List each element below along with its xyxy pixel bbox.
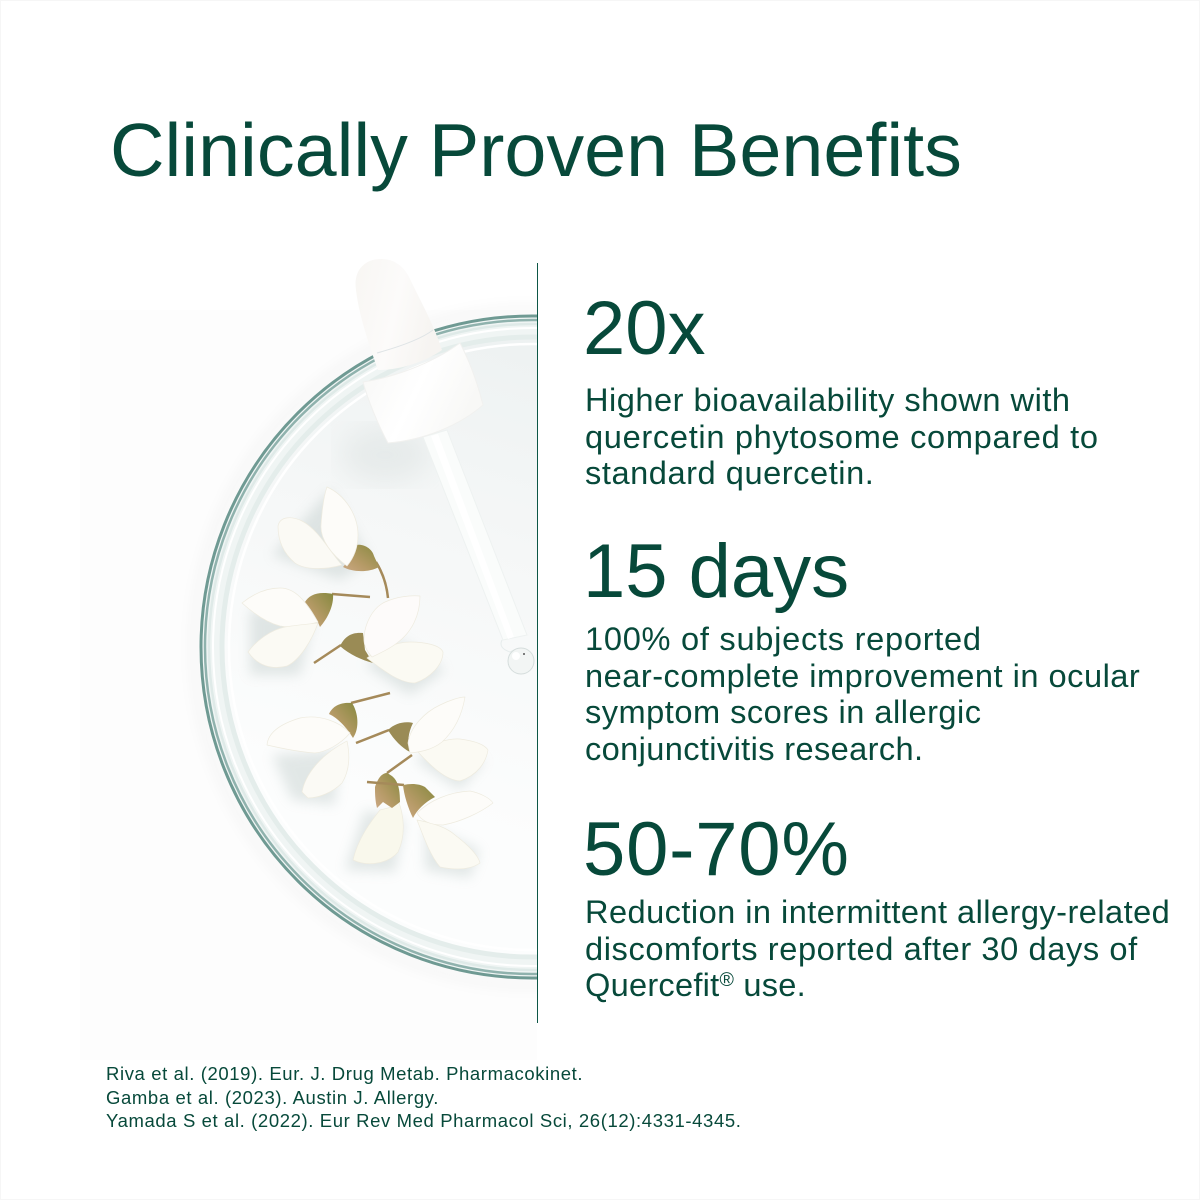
flower A <box>278 487 388 598</box>
stat: 50-70% <box>583 807 1170 1003</box>
flower F <box>353 755 412 864</box>
flower C <box>314 596 443 683</box>
flower B <box>242 588 370 667</box>
flower G <box>367 782 493 869</box>
references: Gamba et al. (2023). Austin J. Allergy. <box>106 1087 439 1108</box>
petri dish <box>200 314 537 980</box>
stat description 15 days: symptom scores in allergic <box>585 693 982 730</box>
stat value 15 days: 15 days <box>583 528 849 614</box>
flower E <box>356 697 488 781</box>
stat description 20x: Higher bioavailability shown with <box>585 381 1070 418</box>
references <box>106 1063 742 1131</box>
stat description 20x <box>585 381 1099 491</box>
stat description 15 days: 100% of subjects reported <box>585 620 982 657</box>
references: Riva et al. (2019). Eur. J. Drug Metab. Pharmacokinet. <box>106 1063 583 1084</box>
photo: petri dish with dropper and flowers <box>200 259 537 980</box>
references: Yamada S et al. (2022). Eur Rev Med Pharmacol Sci, 26(12):4331-4345. <box>106 1110 742 1131</box>
stat: 20x <box>583 286 1099 491</box>
stat description 15 days <box>585 620 1140 767</box>
stat description 50-70%: discomforts reported after 30 days of <box>585 930 1138 967</box>
stat description 50-70%: Quercefit® use. <box>585 966 806 1003</box>
stat description 50-70% <box>585 893 1170 1003</box>
stat value 20x: 20x <box>583 286 706 371</box>
stat description 20x: standard quercetin. <box>585 454 874 491</box>
title: Clinically Proven Benefits <box>110 108 962 192</box>
stat description 20x: quercetin phytosome compared to <box>585 418 1099 455</box>
stat description 15 days: near-complete improvement in ocular <box>585 657 1140 694</box>
stat description 15 days: conjunctivitis research. <box>585 730 923 767</box>
stat value 50-70%: 50-70% <box>583 807 850 892</box>
stat description 50-70%: Reduction in intermittent allergy-related <box>585 893 1170 930</box>
vertical divider <box>537 263 538 1023</box>
stat: 15 days <box>583 528 1140 767</box>
flower D <box>267 693 390 798</box>
dropper <box>340 259 534 674</box>
photo background <box>80 310 537 1060</box>
flowers <box>242 487 493 878</box>
